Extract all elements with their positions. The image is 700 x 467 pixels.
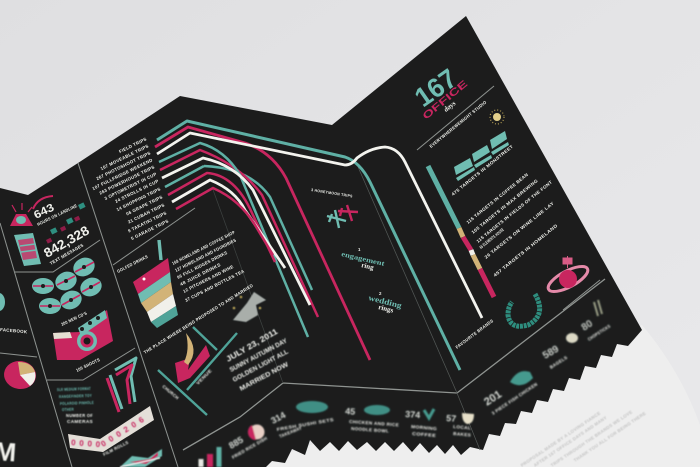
stacked bar (428, 166, 494, 297)
stat: engagement ring (341, 247, 386, 272)
faint text on lower sheet: PROPOSAL MADE BY A LOVING FIANCE (520, 410, 602, 467)
icon: teal circle (0, 293, 5, 311)
icon: laurel wreath (508, 294, 540, 326)
text block: wedding date: SUNNY AUTUMN DAY (229, 337, 289, 374)
panel: list of trips: 21 CUBAN TRIPS (127, 202, 165, 225)
stat: 57 (446, 413, 474, 438)
label: favourite brands: FAVOURITE BRANDS (455, 318, 494, 350)
panel: list of trips: FIELD TRIPS (118, 136, 147, 154)
faint text on lower sheet: AFTER 167 OFFICE DAYS AND MANY (533, 415, 608, 467)
icon: grey bird figure with dots (233, 292, 266, 322)
camera stat lines: NUMBER OF (66, 413, 93, 418)
icon: three benches (454, 131, 509, 181)
heading: 167: 167 (409, 63, 462, 113)
icon: two airplanes (327, 205, 358, 228)
facebook label: FACEBOOK (0, 327, 28, 334)
panel: far left fragments (0, 293, 38, 467)
text block: drink details: 127 HOMELAND AND FOUNDRIES (174, 238, 237, 273)
icon: bottles (201, 447, 219, 467)
label: golfed drinks: GOLFED DRINKS (116, 254, 149, 274)
text block: drink details: 168 HOMELAND AND COFFEE SHOP (171, 230, 236, 266)
stat: 57: LOCAL (453, 424, 471, 431)
stat: engagement ring: ring (361, 261, 375, 272)
text block: drink details (171, 230, 246, 303)
panel: bottom stats strip (201, 300, 611, 467)
stat: 57: BAKES (453, 431, 471, 438)
stat: 374: COFFEE (412, 431, 436, 438)
icon: layered cup with straw (133, 240, 178, 328)
chart: curved trip lines (155, 121, 482, 370)
heading: office: OFFICE (421, 78, 470, 122)
pie chart (2, 359, 38, 391)
stat: engagement ring: engagement (341, 250, 386, 268)
text block: target list: 65 ELEMENTS HOUSE (478, 227, 505, 250)
panel: list of trips: 06 GRAPE TRIPS (125, 194, 163, 216)
icon: camera (53, 310, 113, 360)
camera stat lines: SLR MEDIUM FORMAT (57, 386, 91, 392)
stat: 80: CHOPSTICKS (587, 323, 611, 342)
paper sheet below the brochure (250, 325, 700, 467)
text block: drink details: 12 PITCHERS AND WINE (182, 264, 234, 294)
film counter strip: 0000 (71, 438, 101, 449)
panel: list of trips (91, 136, 169, 241)
stat: 45: NOODLE BOWL (351, 426, 389, 434)
panel: honeymoon and rings (311, 188, 403, 315)
film counter strip: 000206 (99, 415, 146, 449)
stat: 201: 3 PIECE FISH CHICKEN (491, 381, 538, 416)
text block: wedding date: JULY 23, 2011 (224, 327, 280, 364)
stat: 314 (269, 401, 334, 439)
stat: 57: 57 (446, 413, 457, 424)
icon: sneaker (120, 449, 162, 467)
panel: list of trips: 14 SHOPPING TRIPS (116, 186, 161, 212)
text block: target list: 105 TARGETS IN MAX BREWING (470, 178, 539, 235)
text block: wedding date: MARRIED NOW (239, 361, 290, 393)
stat: ball: 885 (227, 435, 245, 451)
panel: list of trips: 9 TAKATIKI TRIPS (127, 210, 167, 234)
label: shoots: 100 SHOOTS (75, 357, 101, 373)
label: honeymoon trips: 3 HONEYMOON TRIPS (311, 188, 353, 199)
text block: target list: 457 TARGETS IN HOMELAND (492, 223, 559, 278)
stat: 80: 80 (580, 318, 595, 334)
panel: list of trips: 24 STROLLS IN CUP (114, 178, 159, 204)
stat: 201 (482, 371, 538, 416)
map illustration: CHURCH (161, 384, 180, 401)
icon: pink telephone (10, 203, 33, 226)
stat: 589 (541, 333, 578, 370)
stat: ball (227, 424, 268, 460)
camera stat lines: RANGEFINDER TOY (59, 393, 92, 399)
stat: engagement ring: 1 (358, 247, 361, 252)
stat: wedding rings: 2 (379, 291, 382, 296)
camera stat lines: OTHER (62, 407, 74, 412)
stat: 374: MORNING (411, 424, 438, 431)
stat: 374 (405, 409, 438, 438)
stat: 314: FRESH SUSHI SETS (276, 417, 334, 432)
faint text on lower sheet: THANK YOU ALL FOR BEING THERE (573, 411, 647, 463)
text block: target list: 115 TARGETS IN FIELDS OF THE FONT (475, 179, 553, 244)
stat: ball: FRIED RICE DISH (231, 436, 268, 460)
text block: target list: 115 TARGETS IN COFFEE BEAN (465, 172, 529, 225)
faint text on lower sheet: TRIPS THROUGH THE BRANDS WE LOVE (550, 409, 633, 467)
stat: 314: 314 (269, 410, 287, 426)
faint text on lower sheet (520, 409, 647, 467)
stat: 643 hours on landline: 643 (32, 202, 56, 222)
label: studio: EVERYWHEREWEMIGHT STUDIO (428, 99, 488, 149)
stat: 45 (345, 405, 399, 434)
stat: wedding rings: wedding (368, 293, 403, 310)
text block: wedding date (224, 327, 290, 393)
icon: smartphone (14, 233, 41, 266)
text block: drink details: 37 CUPS AND BOTTLES TEA (184, 268, 246, 303)
stat: 314: TAKEAWAY (279, 425, 303, 439)
text: the place where being proposed to: THE PLACE WHERE BEING PROPOSED TO AND MARRIED (143, 283, 254, 355)
stat: 842,328 text messages: TEXT MESSAGES (49, 243, 84, 266)
icon: sun (490, 110, 504, 124)
big number 17 (107, 358, 136, 412)
panel: communications (10, 196, 92, 266)
stat: 201: 201 (482, 388, 504, 409)
heading: days: days (442, 99, 458, 114)
panel: list of trips: 3 OPTOMETRIST IN CUP (104, 171, 157, 201)
stat: wedding rings: rings (378, 303, 394, 315)
stat: 80 (580, 300, 611, 342)
panel: list of trips: 263 POWERHOUSE TRIPS (99, 164, 155, 196)
camera stat lines: POLAROID PINHOLE (60, 400, 94, 406)
text block: drink details: 96 FULL RIDGES DRINKS (176, 250, 228, 280)
label: targets in monstreet: 475 TARGETS IN MONSTREET (450, 144, 514, 197)
text block: drink details: 48 JUICE DRINKS (179, 262, 222, 287)
panel: cameras and film (57, 358, 162, 467)
small message icons (46, 202, 86, 244)
camera stat lines: CAMERAS (67, 419, 93, 424)
label: film rolls: FILM ROLLS (102, 440, 129, 457)
stat: 643 hours on landline: HOURS ON LANDLINE (36, 203, 78, 227)
panel: drinks and proposal (116, 230, 290, 415)
camera stat lines (57, 386, 94, 424)
stat: 45: CHICKEN AND RICE (349, 419, 399, 427)
film counter strip (68, 406, 154, 452)
panel: list of trips: 267 PHOTOSHOOT TRIPS (95, 150, 151, 181)
text block: target list: 26 TARGETS ON WINE LINE LAY (483, 201, 555, 260)
arc above landline figure (33, 196, 53, 209)
stat: 589: 589 (541, 344, 561, 362)
icon: pink orb brand logo (545, 256, 591, 296)
fold lines and dividers (0, 86, 605, 467)
label: CDs: 300 NEW CD'S (60, 311, 88, 327)
panel: list of trips: 5 GARAGE TRIPS (130, 218, 169, 241)
panel: office days (409, 63, 591, 350)
text block: target list (465, 172, 559, 278)
stat: 842,328 text messages: 842,328 (41, 223, 92, 261)
map illustration (158, 327, 237, 415)
stat: 374: 374 (405, 409, 421, 420)
panel: list of trips: 107 FULLFRIDGE WEEKEND (91, 157, 153, 191)
stat: 45: 45 (345, 406, 356, 417)
map illustration: VENUE (195, 368, 213, 386)
stat: 589: BAGELS (549, 355, 568, 370)
icons: six compact discs (32, 254, 105, 314)
stat: wedding rings (368, 291, 403, 315)
text block: wedding date: GOLDEN LIGHT ALL (232, 348, 290, 384)
panel: list of trips: 167 MOVEABLE TRIPS (100, 143, 149, 171)
